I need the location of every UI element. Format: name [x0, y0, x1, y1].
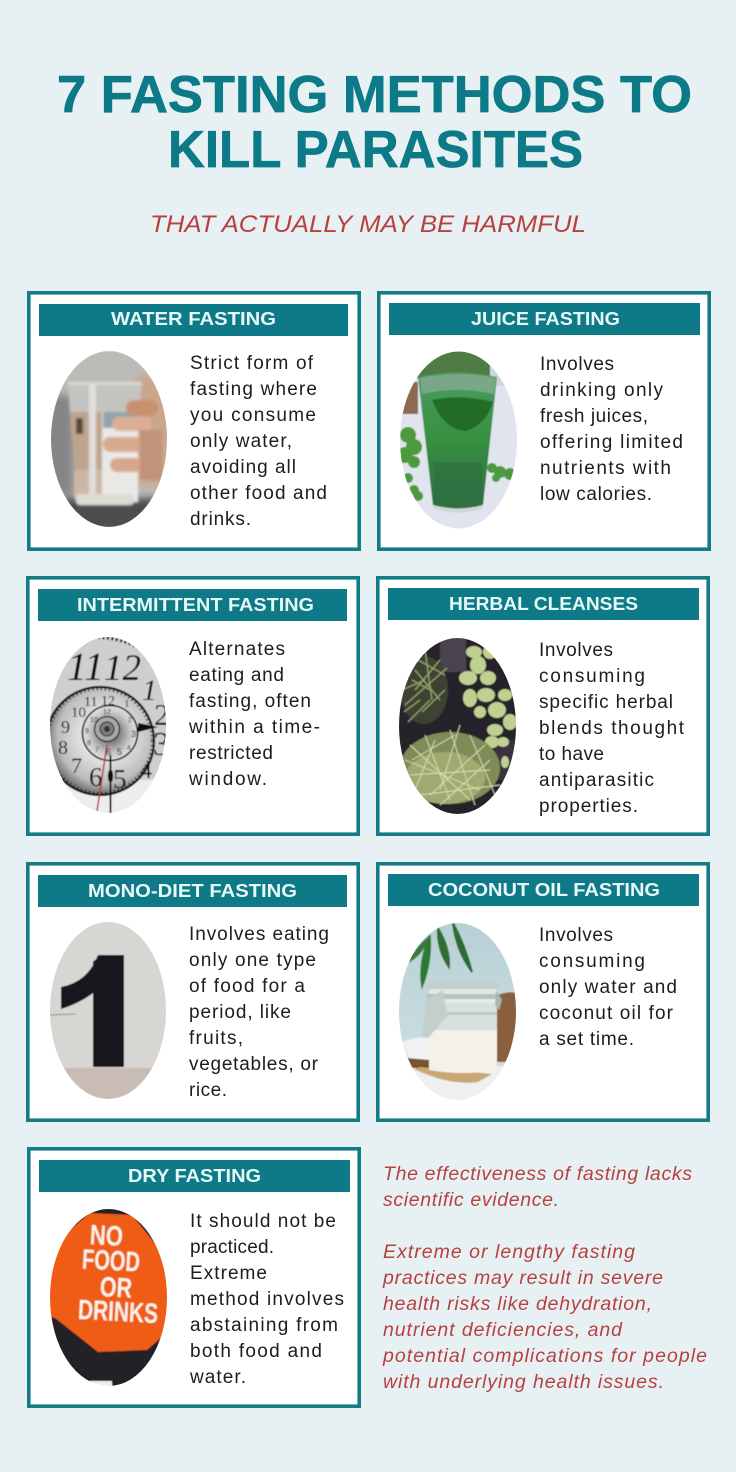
photo: no food or drinks sign: OR	[99, 1271, 133, 1304]
description: avoiding all	[190, 457, 296, 478]
heading bar: COCONUT OIL FASTING	[428, 880, 660, 900]
description: Extreme	[190, 1263, 267, 1284]
heading bar	[388, 874, 699, 906]
description	[189, 924, 329, 1101]
photo: green juice glass	[397, 350, 520, 530]
photo: spiral clock: 3	[153, 726, 170, 763]
description	[539, 925, 677, 1050]
description: of food for a	[189, 976, 305, 997]
description: fruits,	[189, 1028, 243, 1049]
description: other food and	[190, 483, 327, 504]
heading bar: JUICE FASTING	[471, 309, 620, 329]
card frame	[28, 864, 358, 1120]
callout: evidence warning: potential complications for people	[382, 1345, 707, 1367]
heading bar	[38, 875, 347, 907]
photo: spiral clock: 6	[89, 762, 102, 792]
description: only water,	[190, 431, 292, 452]
description: blends thought	[539, 718, 685, 739]
heading bar	[388, 588, 699, 620]
callout: evidence warning: nutrient deficiencies, and	[383, 1319, 623, 1341]
title	[57, 66, 692, 179]
card frame	[378, 578, 708, 834]
description: antiparasitic	[539, 770, 654, 791]
photo: spiral clock	[46, 635, 170, 816]
photo: spiral clock: 1	[142, 674, 157, 707]
card frame	[29, 1149, 359, 1406]
title: 7 FASTING METHODS TO	[57, 66, 692, 124]
card frame	[379, 293, 709, 549]
heading bar	[39, 304, 348, 336]
description: drinking only	[540, 380, 664, 401]
description: eating and	[189, 665, 284, 686]
photo: spiral clock: 7	[71, 753, 82, 778]
description: offering limited	[540, 432, 683, 453]
description: fasting, often	[189, 691, 311, 712]
photo: spiral clock: 8	[87, 740, 91, 747]
heading bar	[39, 1160, 350, 1192]
description: you consume	[190, 405, 316, 426]
description: Strict form of	[190, 353, 314, 374]
photo: spiral clock: 12	[104, 648, 141, 689]
photo: no food or drinks sign: DRINKS	[77, 1294, 159, 1329]
description: drinks.	[190, 509, 251, 530]
panel: mono-diet fasting	[28, 864, 358, 1120]
photo: no food or drinks sign: FOOD	[81, 1244, 141, 1278]
description: Involves	[539, 925, 613, 946]
photo: painted number one: 1	[64, 919, 155, 1102]
panel: dry fasting	[29, 1149, 359, 1406]
photo: no food or drinks sign: NO	[89, 1219, 124, 1252]
panel: intermittent fasting	[28, 578, 358, 834]
description: Involves	[540, 354, 614, 375]
photo: spiral clock: 11	[84, 695, 97, 710]
description: Involves eating	[189, 924, 329, 945]
description: restricted	[189, 743, 273, 764]
photo: spiral clock: 12	[101, 694, 115, 709]
photo: spiral clock: 4	[140, 758, 152, 784]
photo: spiral clock: 3	[131, 729, 136, 739]
heading bar: WATER FASTING	[111, 309, 276, 329]
description: consuming	[539, 666, 645, 687]
subtitle: THAT ACTUALLY MAY BE HARMFUL	[150, 211, 586, 238]
photo: spiral clock: 1	[124, 698, 130, 710]
callout: evidence warning: The effectiveness of fasting lacks	[383, 1163, 692, 1185]
photo: spiral clock: 9	[85, 728, 89, 735]
panel: juice fasting	[379, 293, 709, 549]
callout: evidence warning: Extreme or lengthy fasting	[383, 1241, 635, 1263]
description: It should not be	[190, 1211, 336, 1232]
photo: spiral clock: 2	[128, 717, 132, 724]
description: vegetables, or	[189, 1054, 319, 1075]
description: consuming	[539, 951, 645, 972]
photo: spiral clock: 6	[106, 747, 111, 757]
panel: herbal cleanses	[378, 578, 708, 834]
callout: evidence warning: practices may result in severe	[382, 1267, 663, 1289]
description	[190, 353, 327, 530]
photo: spiral clock: 12	[103, 709, 111, 716]
description: coconut oil for	[539, 1003, 674, 1024]
callout: evidence warning: health risks like dehydration,	[383, 1293, 652, 1315]
callout: evidence warning: with underlying health issues.	[383, 1371, 664, 1393]
description: fresh juices,	[540, 406, 648, 427]
photo: coconut oil jar	[397, 921, 519, 1103]
heading bar: INTERMITTENT FASTING	[77, 595, 314, 615]
photo: spiral clock: 10	[90, 717, 98, 724]
description	[540, 354, 683, 505]
card frame	[29, 293, 359, 549]
photo: spiral clock: 10	[71, 705, 86, 721]
photo: spiral clock: 4	[127, 745, 131, 752]
description: water.	[189, 1367, 246, 1388]
photo: spiral clock: 11	[67, 644, 104, 689]
description	[539, 640, 685, 817]
card frame	[28, 578, 358, 834]
callout: evidence warning	[382, 1163, 707, 1393]
photo: spiral clock: 9	[61, 717, 70, 737]
description: abstaining from	[190, 1315, 338, 1336]
panel: water fasting	[29, 293, 359, 549]
description: low calories.	[540, 484, 652, 505]
description: rice.	[189, 1080, 227, 1101]
heading bar: HERBAL CLEANSES	[449, 594, 638, 614]
photo: spiral clock: 8	[58, 737, 68, 759]
description: properties.	[539, 796, 638, 817]
description: specific herbal	[539, 692, 673, 713]
description: to have	[539, 744, 604, 765]
description: practiced.	[190, 1237, 274, 1258]
photo: spiral clock: 5	[117, 747, 122, 757]
photo: spiral clock: 7	[95, 747, 99, 754]
description: Alternates	[189, 639, 285, 660]
heading bar: MONO-DIET FASTING	[88, 881, 297, 901]
description: window.	[188, 769, 267, 790]
heading bar	[389, 303, 700, 335]
description: nutrients with	[540, 458, 671, 479]
panel: coconut oil fasting	[378, 864, 708, 1120]
description: only one type	[189, 950, 316, 971]
callout: evidence warning: scientific evidence.	[383, 1189, 559, 1211]
heading bar: DRY FASTING	[128, 1166, 261, 1186]
photo: fresh herbs	[397, 636, 519, 816]
description	[188, 639, 320, 790]
description: method involves	[190, 1289, 344, 1310]
description	[189, 1211, 344, 1388]
heading bar	[38, 589, 347, 621]
title: KILL PARASITES	[168, 121, 583, 179]
description: period, like	[189, 1002, 291, 1023]
description: within a time-	[188, 717, 320, 738]
description: a set time.	[539, 1029, 634, 1050]
card frame	[378, 864, 708, 1120]
description: only water and	[539, 977, 677, 998]
photo: spiral clock: 5	[113, 764, 126, 794]
photo: spiral clock: 2	[154, 697, 170, 732]
photo: hand holding glass of water	[51, 351, 167, 527]
photo: no food or drinks sign	[46, 1207, 170, 1389]
description: Involves	[539, 640, 613, 661]
description: fasting where	[190, 379, 317, 400]
description: both food and	[190, 1341, 322, 1362]
